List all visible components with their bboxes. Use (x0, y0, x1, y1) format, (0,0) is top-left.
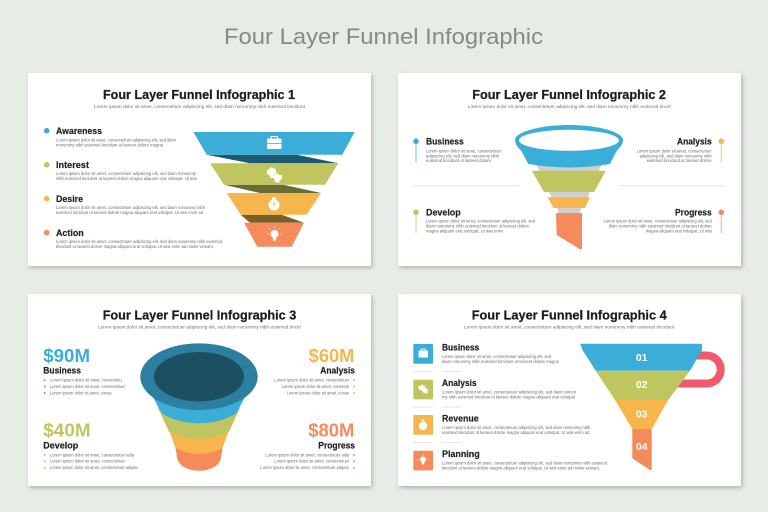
item: develop: diam nonummy nibh euismod tincidunt ut laoreet dolore (426, 224, 529, 228)
item: business: euismod tincidunt ut laoreet dolore (426, 158, 491, 163)
stat: business: Lorem ipsum dolor sit amet, consectetuer (50, 384, 125, 389)
item: action: Lorem ipsum dolor sit amet, consectetuer adipiscing elit, sed diam nonummy nibh euismod (56, 239, 222, 244)
stat: progress (260, 421, 355, 470)
item: action: Action (56, 228, 84, 239)
panel: funnel 3 (28, 294, 371, 486)
item: interest (44, 160, 197, 181)
row: business: Lorem ipsum dolor sit amet, consectetuer adipiscing elit, sed (442, 354, 551, 359)
icon: bulb (267, 226, 282, 241)
item: awareness: nonummy nibh euismod tincidunt ut laoreet dolore magna (56, 142, 163, 148)
item: progress: Progress (675, 208, 712, 219)
row: planning (413, 449, 607, 470)
item: desire (44, 194, 205, 215)
stat: analysis (274, 346, 355, 396)
subtitle: funnel 3: Lorem ipsum dolor sit amet, consectetuer adipiscing elit, sed diam nonummy nibh euismod tincid (98, 324, 301, 329)
stat: develop: Develop (43, 440, 78, 452)
funnel chart 4: 02 (636, 379, 648, 391)
item: desire: Desire (56, 194, 83, 205)
item: desire: Lorem ipsum dolor sit amet, consectetuer adipiscing elit, sed diam nonummy nibh (56, 205, 205, 210)
item: analysis (637, 137, 724, 163)
funnel chart 4 (580, 344, 721, 470)
heading: funnel 3: Four Layer Funnel Infographic 3 (103, 307, 296, 322)
row: planning: tincidunt ut laoreet dolore magna aliquam erat volutpat. Ut wisi enim ad minim veniam, (442, 466, 600, 470)
panel: funnel 2 (398, 73, 741, 266)
heading: funnel 4: Four Layer Funnel Infographic 4 (472, 307, 667, 322)
row: analysis: Analysis (442, 378, 477, 389)
stat: business: Lorem ipsum dolor sit amet, consectetu (50, 378, 122, 382)
row: business: diam nonummy nibh euismod tincidunt ut laoreet dolore magna (442, 359, 559, 364)
panel: funnel 1 (28, 73, 371, 266)
stat: analysis: $60M (309, 346, 354, 366)
row: analysis: Lorem ipsum dolor sit amet, consectetuer adipiscing elit, sed diam nonum (442, 390, 576, 394)
stat: analysis: Lorem ipsum dolor sit amet, consecte (282, 384, 350, 389)
row: business: Business (442, 343, 479, 354)
main title: Four Layer Funnel Infographic (224, 24, 543, 49)
item: analysis: Analysis (677, 137, 712, 148)
stat: develop: Lorem ipsum dolor sit amet, consectetuer (50, 459, 125, 464)
item: progress: diam nonummy nibh euismod tincidunt ut laoreet dolore (609, 224, 712, 228)
stat: develop: $40M (43, 421, 91, 441)
stat: business (43, 346, 125, 396)
funnel chart 2 (515, 125, 623, 250)
funnel chart 1 (193, 132, 355, 247)
item: business: adipiscing elit, sed diam nonummy nibh (426, 153, 499, 158)
stat: progress: Lorem ipsum dolor sit amet, consectetuer (274, 459, 350, 464)
row: revenue (413, 414, 591, 435)
stat: analysis: Lorem ipsum dolor sit amet, consectetuer (274, 378, 350, 382)
heading: funnel 2: Four Layer Funnel Infographic 2 (472, 87, 666, 102)
row: analysis: my nibh euismod tincidunt ut laoreet dolore magna aliquam erat volutpat (442, 394, 576, 400)
item: progress: Lorem ipsum dolor sit amet, consectetuer adipiscing elit, sed (604, 218, 712, 224)
row: revenue: Lorem ipsum dolor sit amet, consectetuer adipiscing elit, sed diam nonummy nibh (442, 425, 591, 430)
icon: puzzle (266, 167, 282, 183)
row: business (413, 343, 559, 364)
funnel handle (670, 356, 721, 384)
subtitle: funnel 2: Lorem ipsum dolor sit amet, consectetuer adipiscing elit, sed diam nonummy nibh euismod tincid (468, 104, 671, 109)
stat: progress: Progress (318, 440, 355, 452)
item: awareness (44, 126, 176, 148)
stat: progress: $80M (308, 421, 354, 441)
item: progress (604, 208, 724, 234)
icon: stopwatch (268, 198, 280, 210)
item: analysis: euismod tincidunt ut laoreet dolore (647, 158, 712, 163)
funnel chart 4: 04 (636, 441, 648, 453)
item: action: tincidunt ut laoreet dolore magna aliquam erat volutpat. Ut wisi enim ad minim veniam, (56, 244, 214, 249)
icon: briefcase (267, 136, 282, 149)
row: planning: Planning (442, 449, 480, 460)
stat: develop (43, 421, 139, 470)
subtitle: funnel 1: Lorem ipsum dolor sit amet, consectetuer adipiscing elit, sed diam nonummy nibh euismod tincidunt (94, 104, 306, 109)
stat: develop: Lorem ipsum dolor sit amet, consectetuer adip (50, 452, 134, 457)
item: desire: euismod tincidunt ut laoreet dolore magna aliquam erat volutpat. Ut wisi enim ad (56, 210, 203, 215)
item: business: Business (426, 137, 464, 148)
funnel chart 4: 01 (636, 352, 648, 364)
item: awareness: Awareness (56, 126, 102, 137)
row: analysis (413, 378, 576, 400)
funnel chart 4: 03 (636, 409, 648, 421)
stat: business: $90M (43, 346, 90, 366)
row: planning: Lorem ipsum dolor sit amet, consectetuer adipiscing elit, sed diam nonummy nibh euismod (442, 460, 607, 466)
item: business: Lorem ipsum dolor sit amet, consectetuer (426, 148, 501, 154)
item: interest: nibh euismod tincidunt ut laoreet dolore magna aliquam erat volutpat. Ut wisi (56, 176, 197, 181)
stat: business: Business (43, 366, 81, 377)
item: awareness: Lorem ipsum dolor sit amet, consectetuer adipiscing elit, sed diam (56, 138, 176, 142)
item: develop: Lorem ipsum dolor sit amet, consectetuer adipiscing elit, sed (426, 218, 535, 224)
item: interest: Lorem ipsum dolor sit amet, consectetuer adipiscing elit, sed diam nonummy (56, 171, 197, 176)
subtitle: funnel 4: Lorem ipsum dolor sit amet, consectetuer adipiscing elit, sed diam nonummy nibh euismod tincidunt (464, 324, 675, 329)
item: develop: Develop (426, 208, 461, 219)
item: develop: magna aliquam erat volutpat. Ut wisi enim (426, 228, 503, 234)
item: analysis: Lorem ipsum dolor sit amet, consectetuer (637, 148, 712, 154)
stat: business: Lorem ipsum dolor sit amet, conse (50, 390, 112, 396)
stat: progress: Lorem ipsum dolor sit amet, consectetuer adipisc (260, 465, 350, 470)
panel: funnel 4 (398, 294, 741, 486)
item: analysis: adipiscing elit, sed diam nonummy nibh (640, 153, 712, 158)
row: revenue: euismod tincidunt ut laoreet dolore magna aliquam erat volutpat. Ut wisi enim ad (442, 430, 590, 435)
stat: analysis: Lorem ipsum dolor sit amet, conse (287, 390, 350, 396)
item: business (413, 137, 501, 163)
stat: develop: Lorem ipsum dolor sit amet, consectetuer adipisc (50, 465, 139, 470)
item: develop (413, 208, 535, 234)
stat: progress: Lorem ipsum dolor sit amet, consectetuer adip (265, 452, 350, 457)
item: action (44, 228, 222, 249)
funnel chart 3 (140, 343, 258, 471)
row: revenue: Revenue (442, 414, 479, 425)
stat: analysis: Analysis (320, 366, 355, 377)
item: progress: magna aliquam erat volutpat. Ut wisi (646, 228, 712, 234)
item: interest: Interest (56, 160, 90, 171)
heading: funnel 1: Four Layer Funnel Infographic 1 (103, 87, 295, 102)
